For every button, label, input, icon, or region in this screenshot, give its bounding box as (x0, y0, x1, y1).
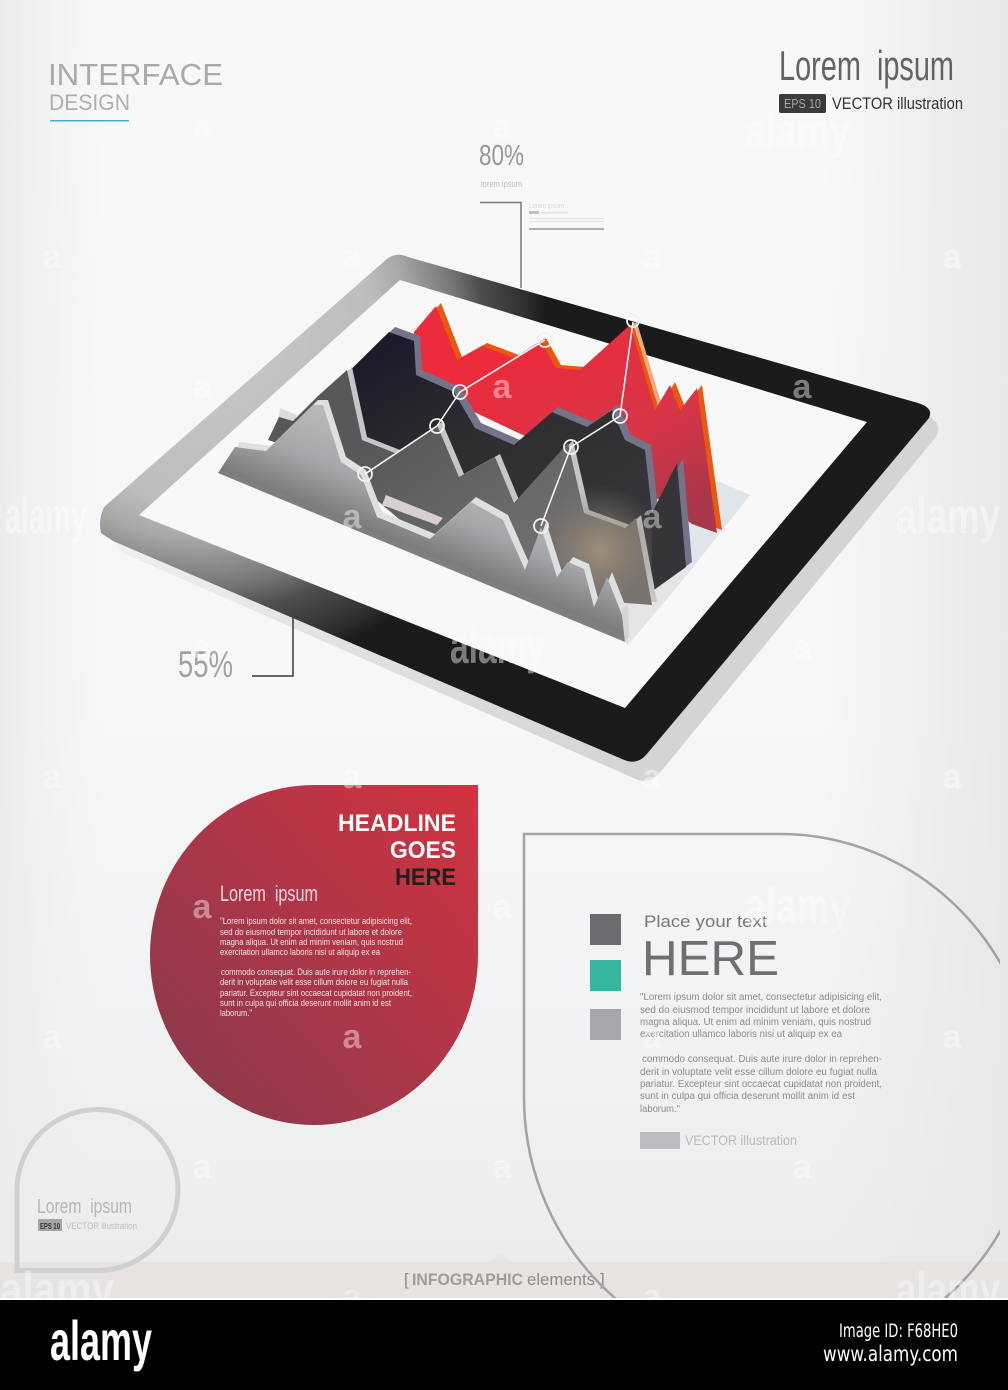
stock watermarks: a (343, 498, 363, 536)
red panel body text: sed do eiusmod tempor incididunt ut labore et dolore (220, 927, 402, 937)
data point markers (358, 315, 639, 533)
red panel body text: laborum." (220, 1008, 252, 1018)
tablet screen (139, 280, 867, 708)
black footer bar (0, 1300, 1008, 1390)
red panel body text: "Lorem ipsum dolor sit amet, consectetur adipisicing elit, (220, 916, 412, 926)
panel: red drop (150, 785, 478, 1125)
header: lorem ipsum, EPS 10 badge (779, 42, 963, 113)
red panel body text: commodo consequat. Duis aute irure dolor in reprehen- (221, 967, 411, 977)
3D area chart (218, 303, 722, 642)
stock watermarks: a (193, 628, 213, 666)
stock watermarks: a (193, 368, 213, 406)
outline panel body text: laborum." (640, 1104, 680, 1115)
stock watermarks: a (493, 1148, 513, 1186)
stock watermarks: alamy (0, 1262, 114, 1318)
footer band: infographic elements (0, 1254, 1008, 1298)
callout: 80%: 80% (479, 140, 524, 172)
stock watermarks: a (493, 888, 513, 926)
stock watermarks: a (43, 238, 63, 276)
legend squares (590, 914, 621, 1040)
footer band: infographic elements: INFOGRAPHIC (412, 1270, 523, 1289)
title: interface design: DESIGN (49, 90, 130, 115)
footer band: infographic elements: [ (404, 1270, 409, 1289)
title: interface design: INTERFACE (48, 57, 223, 92)
stock watermarks: alamy (5, 488, 87, 544)
stock watermarks: a (793, 1148, 813, 1186)
tablet body (100, 255, 930, 762)
red panel body text: sunt in culpa qui officia deserunt mollit anim id est (220, 998, 391, 1008)
headline (338, 810, 456, 891)
stock watermarks: alamy (745, 103, 850, 159)
stock watermarks: a (943, 238, 963, 276)
footer band: infographic elements: elements (527, 1270, 595, 1289)
callout: 80%: Lorem ipsum (529, 203, 564, 210)
outline panel body text: sed do eiusmod tempor incididunt ut labore et dolore (640, 1005, 870, 1016)
footer logo: alamy (50, 1309, 152, 1372)
stock watermarks: a (193, 108, 213, 146)
panel: small outline drop: Lorem ipsum (37, 1196, 132, 1218)
callout: 80% (479, 140, 604, 288)
callout: 80%: lorem ipsum (481, 179, 522, 189)
stock watermarks: a (343, 758, 363, 796)
callout: 55%: 55% (178, 644, 233, 685)
outline panel body text: "Lorem ipsum dolor sit amet, consectetur adipisicing elit, (640, 992, 882, 1003)
mid grey series (268, 367, 657, 605)
stock watermarks: a (493, 108, 513, 146)
stock watermarks: a (793, 628, 813, 666)
headline: HERE (395, 864, 456, 891)
tablet shadow (113, 412, 938, 781)
outline panel body text: derit in voluptate velit esse cillum dolore eu fugiat nulla (640, 1067, 877, 1078)
stock watermarks: a (643, 758, 663, 796)
stock watermarks: a (343, 1278, 363, 1316)
red series (414, 303, 722, 533)
light grey series (218, 400, 630, 642)
stock watermarks: a (193, 1148, 213, 1186)
vector illustration tag: VECTOR illustration (685, 1132, 797, 1148)
stock watermarks: a (943, 1018, 963, 1056)
outline panel body text: magna aliqua. Ut enim ad minim veniam, quis nostrud (640, 1017, 871, 1028)
headline: GOES (390, 837, 456, 864)
red panel body text: magna aliqua. Ut enim ad minim veniam, quis nostrud (220, 937, 403, 947)
data lines (365, 322, 633, 526)
stock watermarks: alamy (745, 878, 850, 934)
tablet device (100, 255, 930, 762)
stock watermarks: alamy (450, 618, 545, 674)
stock watermarks: a (643, 1278, 663, 1316)
stock watermarks: a (643, 1018, 663, 1056)
panel: outline drop (522, 832, 1000, 1298)
stock watermarks: a (493, 368, 513, 406)
outline panel body text: exercitation ullamco laboris nisi ut aliquip ex ea (640, 1029, 842, 1040)
stock watermarks: a (43, 1018, 63, 1056)
outline panel heading: Place your text (644, 912, 767, 931)
red panel body text (220, 916, 412, 1018)
headline: HEADLINE (338, 810, 456, 837)
website: www.alamy.com (823, 1342, 958, 1366)
red panel subheading: Lorem ipsum (220, 881, 318, 906)
outline panel body text: sunt in culpa qui officia deserunt mollit anim id est (640, 1091, 855, 1102)
callout: 55% (178, 617, 293, 685)
stock watermarks: a (193, 888, 213, 926)
title: interface design (48, 57, 223, 122)
image id: Image ID: F68HE0 (839, 1320, 958, 1342)
red panel body text: exercitation ullamco laboris nisi ut aliquip ex ea (220, 947, 380, 957)
stock watermarks: a (943, 758, 963, 796)
red panel body text: pariatur. Excepteur sint occaecat cupidatat non proident, (220, 988, 412, 998)
vector illustration tag (640, 1132, 797, 1149)
panel: small outline drop: EPS 10 (40, 1222, 60, 1231)
outline panel body text (640, 992, 882, 1115)
stock watermarks: a (643, 498, 663, 536)
panel: small outline drop (17, 1110, 178, 1270)
outline panel heading: HERE (642, 932, 779, 986)
red panel body text: derit in voluptate velit esse cillum dolore eu fugiat nulla (220, 977, 408, 987)
footer band: infographic elements: ] (600, 1270, 605, 1289)
chart hole background (625, 470, 750, 645)
header: lorem ipsum, EPS 10 badge: VECTOR illustration (832, 94, 963, 113)
stock watermarks: a (793, 368, 813, 406)
outline panel body text: commodo consequat. Duis aute irure dolor in reprehen- (642, 1054, 882, 1065)
header: lorem ipsum, EPS 10 badge: EPS 10 (784, 96, 821, 111)
stock watermarks: a (343, 1018, 363, 1056)
stock watermarks: a (343, 238, 363, 276)
black series (320, 327, 692, 600)
stock watermarks: a (643, 238, 663, 276)
stock watermarks: a (43, 758, 63, 796)
outline panel body text: pariatur. Excepteur sint occaecat cupidatat non proident, (640, 1079, 882, 1090)
panel: small outline drop: VECTOR illustration (66, 1221, 137, 1231)
